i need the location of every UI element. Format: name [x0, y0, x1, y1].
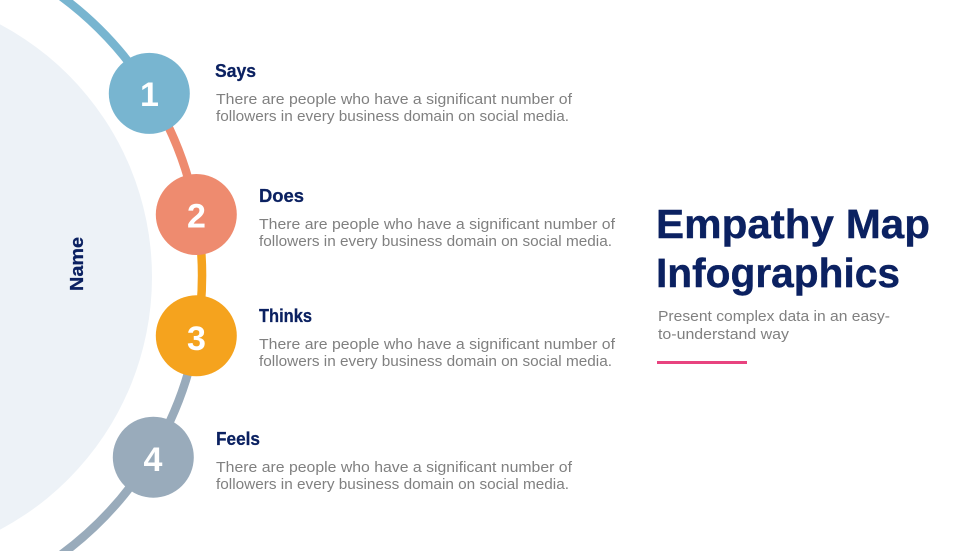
step 4	[113, 417, 573, 498]
heading: Says: Says	[215, 61, 256, 81]
badge 2	[156, 174, 237, 255]
background panel: pale circle	[0, 0, 152, 551]
number 2: 2	[187, 198, 206, 236]
subtitle: to-understand way	[658, 326, 790, 343]
heading: Feels: Feels	[216, 429, 260, 449]
number 3: 3	[187, 320, 206, 358]
body text 3: followers in every business domain on social media.	[259, 353, 612, 370]
body text 2: followers in every business domain on social media.	[259, 233, 612, 250]
body text 4: followers in every business domain on social media.	[216, 476, 569, 493]
badge 3	[156, 295, 237, 376]
arc segment: yellow	[197, 214, 202, 336]
badge 1	[109, 53, 190, 134]
badge 4	[113, 417, 194, 498]
step 1	[109, 53, 573, 134]
heading: Does: Does	[259, 186, 304, 206]
heading: Thinks: Thinks	[259, 306, 312, 326]
body text 2: There are people who have a significant number of	[259, 216, 616, 233]
arc segment: blue	[59, 0, 150, 94]
body text 1: There are people who have a significant number of	[216, 91, 573, 108]
title: Empathy Map	[656, 201, 930, 247]
number 4: 4	[144, 441, 163, 479]
label: Name: Name	[67, 237, 87, 291]
number 1: 1	[140, 76, 159, 114]
accent underline	[657, 361, 747, 364]
step 3	[156, 295, 616, 376]
body text 4: There are people who have a significant number of	[216, 459, 573, 476]
arc segment: orange	[150, 94, 197, 214]
body text 3: There are people who have a significant number of	[259, 336, 616, 353]
step 2	[156, 174, 616, 255]
timeline arc	[59, 0, 202, 551]
subtitle: Present complex data in an easy-	[658, 308, 890, 325]
arc segment: grey	[59, 336, 197, 551]
title: Infographics	[656, 250, 900, 296]
body text 1: followers in every business domain on social media.	[216, 108, 569, 125]
